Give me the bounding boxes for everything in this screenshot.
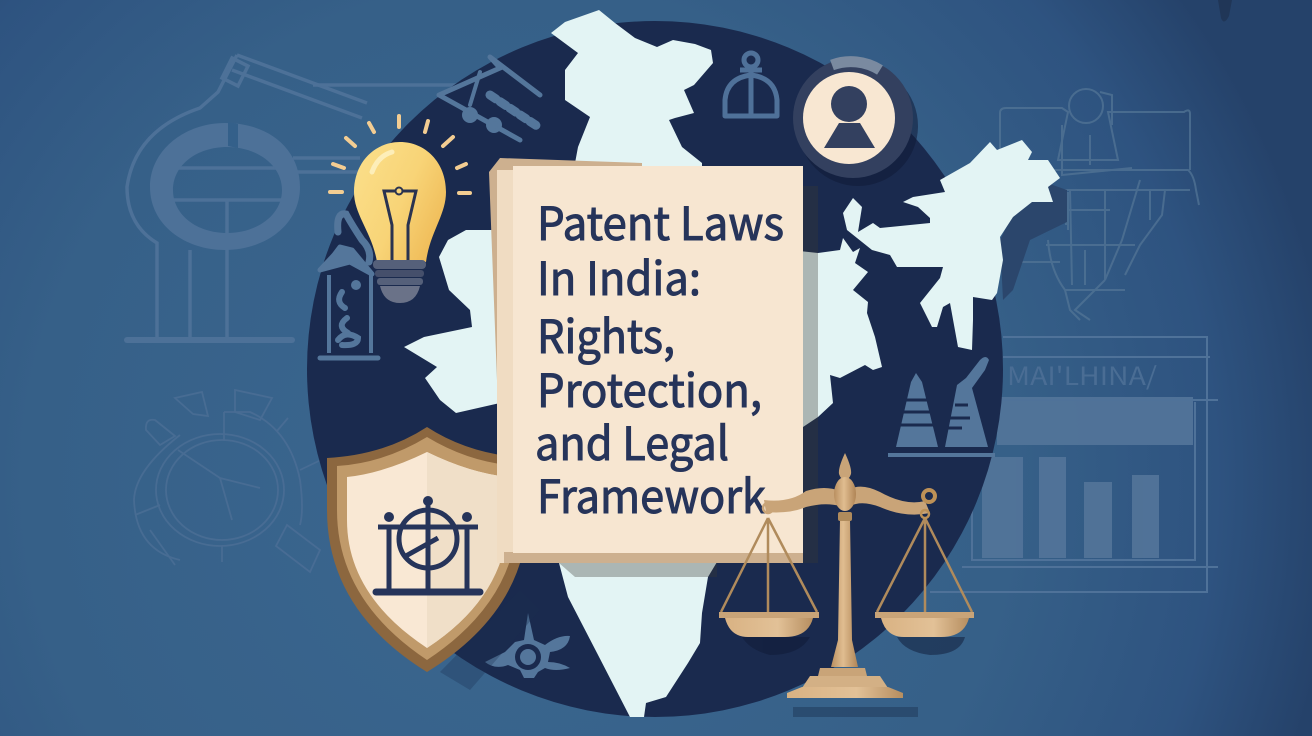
scale strings — [721, 518, 972, 612]
chart bars — [982, 457, 1159, 558]
scale shadows — [742, 637, 965, 717]
icon: gear — [485, 613, 570, 678]
scale base — [818, 668, 867, 676]
map: centre east — [790, 238, 882, 427]
icon: tower — [320, 214, 378, 358]
title text: and Legal — [535, 408, 729, 474]
gate emblem — [376, 496, 480, 592]
shield outer edge — [327, 427, 528, 672]
map of India — [404, 10, 1060, 717]
icon: cones — [888, 357, 995, 457]
bulb rays — [330, 116, 470, 193]
icon: bell dome — [725, 53, 777, 117]
map: west — [404, 230, 500, 413]
background icon: invention machine outline — [127, 55, 490, 340]
icon: light bulb — [330, 116, 470, 303]
background icon: apparatus blueprint — [1000, 89, 1199, 320]
bottom edge — [504, 552, 803, 563]
scales of justice — [719, 453, 974, 717]
person head — [831, 86, 867, 122]
dark globe — [307, 21, 1067, 717]
shield face — [347, 452, 508, 648]
scale beam — [764, 487, 930, 515]
map: north — [551, 10, 713, 190]
shield — [327, 427, 540, 690]
left pan — [725, 618, 813, 637]
background icon: chart panel — [930, 337, 1218, 592]
map: north-east lobe — [843, 140, 1060, 350]
title text: Patent Laws — [537, 188, 784, 254]
title text: In India: — [537, 243, 701, 309]
bulb glass — [354, 142, 446, 262]
shield shadow — [440, 590, 540, 690]
faint chart label: MAI'LHINA/ — [1007, 357, 1157, 393]
title text — [535, 188, 784, 527]
person body — [824, 123, 875, 148]
title text: Framework — [537, 461, 766, 527]
document shadow — [559, 186, 818, 577]
background icon: clock gear outline — [134, 390, 325, 572]
bulb screw base — [373, 260, 426, 269]
right pan — [881, 618, 969, 637]
icon: compass tool — [439, 57, 540, 140]
scale column — [831, 520, 858, 667]
back sheet — [489, 158, 642, 563]
chart frame lines — [930, 337, 1218, 592]
icon: person badge — [793, 58, 918, 186]
map: south — [550, 550, 717, 717]
title text: Rights, — [537, 301, 675, 367]
front sheet — [513, 166, 803, 553]
bulb filament — [384, 187, 416, 262]
patent document — [489, 158, 818, 577]
title text: Protection, — [537, 355, 762, 421]
shield inner band — [337, 437, 518, 660]
